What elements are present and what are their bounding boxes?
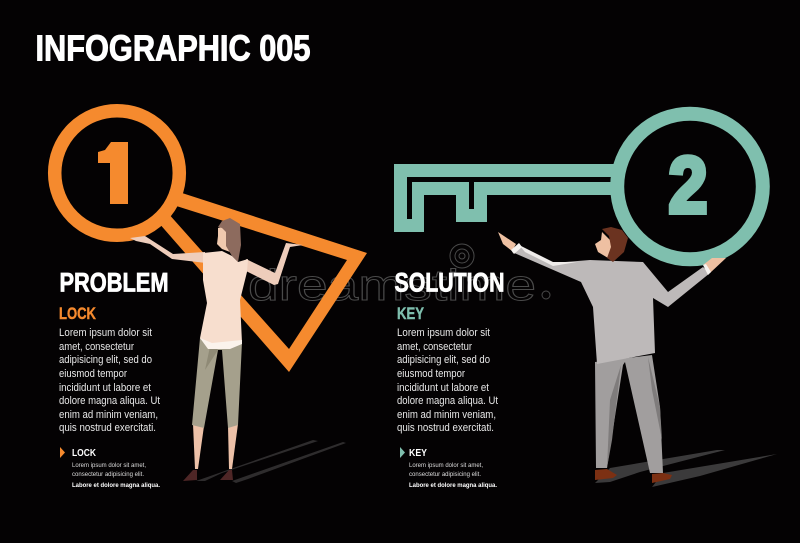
body text: quis nostrud exercitati. <box>397 422 494 434</box>
body text: enim ad minim veniam, <box>59 409 158 421</box>
note arrow <box>400 447 405 458</box>
body text: Lorem ipsum dolor sit <box>397 327 491 339</box>
left hand <box>498 232 516 251</box>
icon: orange lock keyhole <box>55 111 367 372</box>
note: Lorem ipsum dolor sit amet, <box>72 462 146 469</box>
shoes <box>595 469 617 480</box>
body text: Lorem ipsum dolor sit <box>59 327 153 339</box>
body text: adipisicing elit, sed do <box>59 354 152 366</box>
right hand <box>703 258 726 273</box>
calves <box>193 424 204 469</box>
hair <box>602 227 628 262</box>
body text: adipisicing elit, sed do <box>397 354 490 366</box>
note <box>409 447 497 489</box>
body text: amet, consectetur <box>397 341 472 353</box>
title: INFOGRAPHIC 005 <box>36 28 310 68</box>
panel: solution <box>394 268 504 489</box>
number 1 <box>98 142 128 204</box>
body text: eiusmod tempor <box>397 368 465 380</box>
top <box>200 251 248 348</box>
face <box>595 232 612 258</box>
subheading: KEY <box>397 304 424 323</box>
figure shadow: woman <box>196 440 346 483</box>
body text: amet, consectetur <box>59 341 134 353</box>
body text: incididunt ut labore et <box>59 382 152 394</box>
arms <box>130 236 206 263</box>
watermark: dreamstime <box>248 261 536 310</box>
heading: PROBLEM <box>60 268 168 298</box>
face <box>217 226 230 252</box>
body text: dolore magna aliqua. Ut <box>59 395 161 407</box>
note arrow <box>60 447 65 458</box>
body text: enim ad minim veniam, <box>397 409 496 421</box>
note: KEY <box>409 447 427 459</box>
panel: problem <box>59 268 168 489</box>
icon: teal key <box>394 114 763 259</box>
note: consectetur adipisicing elit. <box>72 471 144 478</box>
figure: woman <box>130 218 303 481</box>
heading: SOLUTION <box>394 268 504 298</box>
note: Labore et dolore magna aliqua. <box>409 482 497 489</box>
number 1: 1 <box>96 128 143 222</box>
note <box>72 447 160 489</box>
watermark <box>248 244 550 310</box>
body text: incididunt ut labore et <box>397 382 490 394</box>
shoes <box>183 470 197 481</box>
figure shadow: man <box>595 450 777 487</box>
cuffs <box>511 243 522 254</box>
note: LOCK <box>72 447 96 459</box>
subheading: LOCK <box>59 304 97 323</box>
hair <box>218 218 241 262</box>
figure: man <box>498 227 726 483</box>
trousers <box>192 338 242 428</box>
trousers <box>595 355 663 473</box>
body text <box>397 327 499 434</box>
number 2: 2 <box>668 140 708 230</box>
note: Labore et dolore magna aliqua. <box>72 482 160 489</box>
body text: quis nostrud exercitati. <box>59 422 156 434</box>
note: consectetur adipisicing elit. <box>409 471 481 478</box>
note: Lorem ipsum dolor sit amet, <box>409 462 483 469</box>
body text <box>59 327 161 434</box>
body text: eiusmod tempor <box>59 368 127 380</box>
jacket <box>512 245 710 364</box>
body text: dolore magna aliqua. Ut <box>397 395 499 407</box>
